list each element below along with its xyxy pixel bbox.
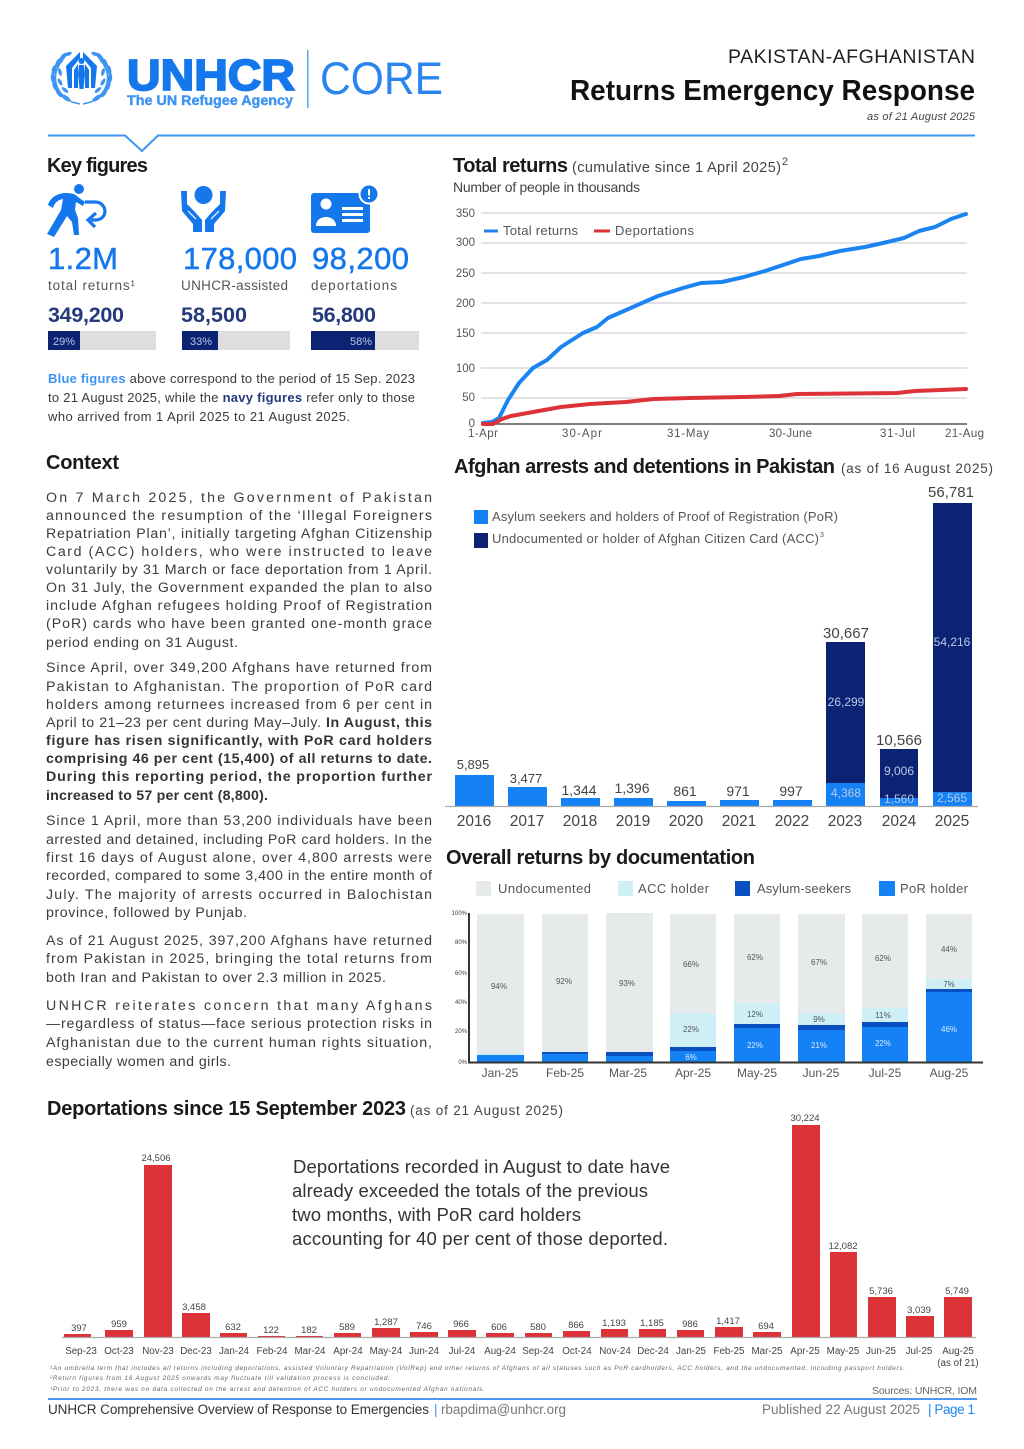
text block: context paragraph 2: holders among returnees increased from 6 per cent in bbox=[46, 697, 432, 713]
text block: context paragraph 5 bbox=[46, 998, 432, 1070]
footer: rbapdima@unhcr.org bbox=[441, 1402, 566, 1417]
text block: context paragraph 3: recorded, compared to some 3,400 in the entire month of bbox=[46, 868, 432, 884]
text block: context paragraph 3: Since 1 April, more than 53,200 individuals have been bbox=[46, 813, 432, 829]
legend: arrests: 3 bbox=[820, 532, 824, 539]
text block: context paragraph 1: (PoR) cards who have been granted one-month grace bbox=[46, 616, 432, 632]
x axis years bbox=[457, 813, 969, 830]
x axis months: Feb-24 bbox=[256, 1346, 288, 1357]
stat: total returns: 349,200 bbox=[48, 303, 124, 327]
x axis years: 2025 bbox=[935, 813, 969, 830]
footer: | Page 1 bbox=[928, 1402, 975, 1417]
y axis percentages: 60% bbox=[455, 971, 468, 977]
bar totals: 1,344 bbox=[561, 782, 597, 798]
percentage labels: 62% bbox=[875, 954, 891, 963]
bar value labels bbox=[71, 1113, 969, 1336]
bar totals: 861 bbox=[673, 783, 697, 799]
heading: deportations bbox=[47, 1098, 563, 1120]
text block: context paragraph 1: Repatriation Plan’, initially targeting Afghan Citizenship bbox=[46, 526, 432, 542]
percentage labels: 7% bbox=[943, 980, 955, 989]
text block: context paragraph 2: comprising 46 per cent (15,400) of all returns to date. bbox=[46, 751, 432, 767]
text block: context paragraph 3: arrested and detained, including PoR card holders. In the bbox=[46, 832, 432, 848]
x axis months: Oct-24 bbox=[562, 1346, 592, 1357]
bar value labels: 122 bbox=[263, 1325, 279, 1336]
panel: context bbox=[46, 452, 432, 1070]
legend: documentation: ACC holder bbox=[638, 881, 710, 896]
bar value labels: 746 bbox=[416, 1321, 432, 1332]
bar totals bbox=[457, 484, 974, 799]
x axis months: Apr-24 bbox=[333, 1346, 363, 1357]
x axis months: Mar-25 bbox=[751, 1346, 783, 1357]
bar value labels: 866 bbox=[568, 1320, 584, 1331]
x axis months: Aug-25 bbox=[930, 1066, 969, 1080]
y axis percentages: 0% bbox=[458, 1060, 468, 1066]
legend: documentation bbox=[476, 881, 969, 896]
heading: total returns: Total returns bbox=[453, 155, 568, 177]
stat: UNHCR-assisted: 58,500 bbox=[181, 303, 247, 327]
text block: key figures note bbox=[47, 371, 415, 424]
text block: context paragraph 4: both Iran and Pakistan to over 2.3 million in 2025. bbox=[46, 970, 386, 986]
legend: arrests: Asylum seekers and holders of Proof of Registration (PoR) bbox=[492, 509, 838, 524]
percentage labels: 44% bbox=[941, 945, 957, 954]
x axis years: 2018 bbox=[563, 813, 597, 830]
bar value labels: 966 bbox=[453, 1319, 469, 1330]
heading: total returns: 2 bbox=[782, 156, 788, 168]
x axis months: Jun-24 bbox=[409, 1346, 440, 1357]
icon: person returning bbox=[47, 184, 105, 237]
x axis months: Sep-24 bbox=[522, 1346, 554, 1357]
x axis months: Apr-25 bbox=[675, 1066, 711, 1080]
bar value labels: 12,082 bbox=[828, 1241, 858, 1252]
icon: UNHCR laurel and sheltering hands emblem bbox=[50, 51, 113, 104]
stat: UNHCR-assisted: 33% bbox=[190, 336, 212, 348]
x axis months: Jan-25 bbox=[482, 1066, 519, 1080]
text block: context paragraph 1: announced the resumption of the ‘Illegal Foreigners bbox=[46, 508, 432, 524]
line: total returns bbox=[483, 214, 966, 423]
y axis percentages: 20% bbox=[455, 1029, 468, 1035]
heading: total returns bbox=[453, 155, 788, 177]
legend: documentation: Asylum-seekers bbox=[757, 881, 852, 896]
x axis months: Dec-23 bbox=[180, 1346, 212, 1357]
text block: context paragraph 1: Card (ACC) holders, who were instructed to leave bbox=[46, 544, 432, 560]
stacked percentage bars bbox=[477, 913, 972, 1062]
y axis labels: 50 bbox=[462, 392, 475, 404]
bar inner values: 1,560 bbox=[884, 792, 914, 806]
bar totals: 10,566 bbox=[876, 732, 922, 749]
text block: context paragraph 3 bbox=[46, 813, 432, 921]
percentage labels: 92% bbox=[556, 977, 572, 986]
footnotes: ³Prior to 2023, there was no data collected on the arrest and detention of ACC holders or undocumented Afghan nationals. bbox=[50, 1386, 485, 1393]
header: report title bbox=[570, 46, 976, 123]
y axis labels: 200 bbox=[456, 298, 475, 310]
y axis percentages: 100% bbox=[452, 911, 468, 917]
stacked bars by year bbox=[455, 503, 972, 806]
text block: context paragraph 5: —regardless of status—face serious protection risks in bbox=[46, 1016, 432, 1032]
bar value labels: 694 bbox=[758, 1321, 774, 1332]
text block: context paragraph 3: first 16 days of August alone, over 4,800 arrests were bbox=[46, 850, 432, 866]
percentage labels: 11% bbox=[875, 1011, 891, 1020]
percentage labels: 93% bbox=[619, 979, 635, 988]
text block: context paragraph 4: As of 21 August 2025, 397,200 Afghans have returned bbox=[46, 933, 432, 949]
stat: deportations: deportations bbox=[311, 278, 397, 293]
bar totals: 971 bbox=[726, 783, 750, 799]
stat: total returns bbox=[48, 241, 156, 350]
text block: context paragraph 1: On 7 March 2025, the Government of Pakistan bbox=[46, 490, 432, 506]
heading: deportations: (as of 21 August 2025) bbox=[410, 1103, 563, 1118]
y axis labels: 0 bbox=[469, 418, 475, 430]
y axis labels: 350 bbox=[456, 208, 475, 220]
percentage labels: 22% bbox=[683, 1025, 699, 1034]
header: report title: PAKISTAN-AFGHANISTAN bbox=[728, 46, 975, 68]
percentage labels: 12% bbox=[747, 1010, 763, 1019]
percentage labels: 62% bbox=[747, 953, 763, 962]
percentage labels: 94% bbox=[491, 982, 507, 991]
x axis months: Jul-25 bbox=[869, 1066, 902, 1080]
text block: context paragraph 2 bbox=[46, 660, 432, 804]
x axis months: Jan-25 bbox=[676, 1346, 707, 1357]
x axis labels: 30-Apr bbox=[562, 428, 602, 440]
bar totals: 56,781 bbox=[928, 484, 974, 501]
stat: UNHCR-assisted: UNHCR-assisted bbox=[181, 278, 288, 293]
bar value labels: 3,458 bbox=[182, 1302, 206, 1313]
footer: | bbox=[434, 1402, 438, 1417]
text block: context paragraph 4 bbox=[46, 933, 432, 986]
footnotes bbox=[50, 1365, 905, 1393]
callout: August deportations: Deportations recorded in August to date have bbox=[293, 1156, 670, 1177]
bar inner values: 2,565 bbox=[937, 791, 967, 805]
x axis months: Apr-25 bbox=[790, 1346, 820, 1357]
heading: deportations: Deportations since 15 September 2023 bbox=[47, 1098, 406, 1120]
x axis months: Nov-23 bbox=[142, 1346, 174, 1357]
subtitle: units: Number of people in thousands bbox=[453, 179, 640, 195]
text block: context paragraph 4: from Pakistan in 2025, bringing the total returns from bbox=[46, 951, 432, 967]
stat: UNHCR-assisted bbox=[181, 241, 297, 350]
x axis months: Aug-25 bbox=[942, 1346, 974, 1357]
stat: total returns: 29% bbox=[53, 336, 75, 348]
bar value labels: 1,287 bbox=[374, 1317, 398, 1328]
monthly deportation bars bbox=[64, 1125, 972, 1337]
stat: deportations: 98,200 bbox=[312, 241, 409, 276]
y axis labels: 100 bbox=[456, 363, 475, 375]
footer: UNHCR Comprehensive Overview of Response to Emergencies bbox=[48, 1402, 429, 1417]
legend: line chart: Deportations bbox=[615, 223, 694, 238]
text block: context paragraph 2: figure has risen significantly, with PoR card holders bbox=[46, 733, 432, 749]
bar value labels: 632 bbox=[225, 1322, 241, 1333]
bar inner values bbox=[828, 635, 971, 806]
heading: total returns: (cumulative since 1 April 2025) bbox=[572, 160, 781, 176]
bar value labels: 5,736 bbox=[869, 1286, 893, 1297]
y axis percentages bbox=[452, 911, 468, 1066]
panel: returns by documentation chart bbox=[446, 847, 983, 1080]
footnotes: ²Return figures from 16 August 2025 onwards may fluctuate till validation process is concluded. bbox=[50, 1375, 390, 1382]
heading: returns by documentation: Overall returns by documentation bbox=[446, 847, 755, 869]
footnotes: ¹An umbrella term that includes all returns including deportations, assisted Voluntary Repatriation (VolRep) and other returns of Afghans of all statuses such as PoR cardholders, ACC holders, and the undocumented, including passport holders. bbox=[50, 1365, 905, 1372]
x axis months: Mar-24 bbox=[294, 1346, 326, 1357]
text block: context paragraph 3: July. The majority of arrests occurred in Balochistan bbox=[46, 887, 432, 903]
percentage labels: 21% bbox=[811, 1041, 827, 1050]
text block: context paragraph 1: include Afghan refugees holding Proof of Registration bbox=[46, 598, 432, 614]
percentage labels: 46% bbox=[941, 1025, 957, 1034]
stat: deportations: 58% bbox=[350, 336, 372, 348]
legend: arrests: Undocumented or holder of Afghan Citizen Card (ACC) bbox=[492, 531, 819, 546]
bar inner values: 4,368 bbox=[831, 786, 861, 800]
x axis months: Jun-25 bbox=[803, 1066, 840, 1080]
x axis labels: 30-June bbox=[769, 428, 812, 440]
text block: context paragraph 1: On 31 July, the Government expanded the plan to also bbox=[46, 580, 432, 596]
bar value labels: 580 bbox=[530, 1322, 546, 1333]
x axis labels: 1-Apr bbox=[468, 428, 498, 440]
x axis months: Jul-24 bbox=[449, 1346, 476, 1357]
bar value labels: 30,224 bbox=[790, 1113, 820, 1124]
x axis years: 2022 bbox=[775, 813, 809, 830]
bar value labels: 986 bbox=[682, 1319, 698, 1330]
panel: deportations bar chart bbox=[47, 1098, 979, 1369]
percentage labels: 67% bbox=[811, 958, 827, 967]
x axis years: 2017 bbox=[510, 813, 544, 830]
text block: context paragraph 2: April to 21–23 per cent during May–July. In August, this bbox=[46, 715, 432, 731]
bar value labels: 397 bbox=[71, 1323, 87, 1334]
header: UNHCR CORE logo bbox=[50, 50, 443, 108]
percentage labels: 66% bbox=[683, 960, 699, 969]
bar totals: 997 bbox=[779, 783, 803, 799]
panel: total returns line chart bbox=[453, 155, 984, 440]
x axis months: Sep-23 bbox=[65, 1346, 97, 1357]
text block: context paragraph 5: especially women and girls. bbox=[46, 1054, 231, 1070]
x axis months: Mar-25 bbox=[609, 1066, 647, 1080]
percentage labels: 6% bbox=[685, 1053, 697, 1062]
bar totals: 3,477 bbox=[510, 771, 542, 786]
bar value labels: 5,749 bbox=[945, 1286, 969, 1297]
stat: total returns: total returns¹ bbox=[48, 278, 136, 293]
bar value labels: 1,193 bbox=[602, 1318, 626, 1329]
percentage labels: 22% bbox=[875, 1039, 891, 1048]
bar value labels: 182 bbox=[301, 1325, 317, 1336]
percentage labels: 22% bbox=[747, 1041, 763, 1050]
heading: arrests and detentions: Afghan arrests and detentions in Pakistan bbox=[454, 456, 835, 478]
x axis years: 2024 bbox=[882, 813, 917, 830]
y axis labels: 250 bbox=[456, 268, 475, 280]
x axis labels bbox=[468, 428, 984, 440]
footer: Published 22 August 2025 bbox=[762, 1402, 920, 1417]
x axis years: 2021 bbox=[722, 813, 756, 830]
x axis years: 2016 bbox=[457, 813, 491, 830]
stat: UNHCR-assisted: 178,000 bbox=[183, 241, 297, 276]
text block: context paragraph 1: period ending on 31 August. bbox=[46, 635, 238, 651]
bar totals: 5,895 bbox=[457, 757, 489, 772]
bar value labels: 606 bbox=[491, 1322, 507, 1333]
stat: deportations: 56,800 bbox=[312, 303, 376, 327]
tagline: The UN Refugee Agency bbox=[127, 93, 294, 108]
bar inner values: 9,006 bbox=[884, 764, 914, 778]
wordmark: UNHCR: UNHCR bbox=[127, 51, 295, 100]
text block: context paragraph 5: UNHCR reiterates concern that many Afghans bbox=[46, 998, 432, 1014]
x axis years: 2023 bbox=[828, 813, 862, 830]
x axis labels: 31-Jul bbox=[880, 428, 915, 440]
x axis months: Dec-24 bbox=[637, 1346, 669, 1357]
text block: context paragraph 3: province, followed by Punjab. bbox=[46, 905, 247, 921]
x axis months: Jun-25 bbox=[866, 1346, 897, 1357]
x axis months: Feb-25 bbox=[546, 1066, 584, 1080]
legend: line chart bbox=[484, 223, 694, 238]
percentage labels bbox=[491, 945, 957, 1062]
x axis months: Feb-25 bbox=[713, 1346, 745, 1357]
bar totals: 1,396 bbox=[614, 780, 650, 796]
panel: arrests and detentions chart bbox=[445, 456, 993, 830]
icon: ID card with alert bbox=[311, 184, 380, 233]
x axis labels: 21-Aug bbox=[945, 428, 984, 440]
bar value labels: 1,185 bbox=[640, 1318, 664, 1329]
x axis labels: 31-May bbox=[667, 428, 709, 440]
bar value labels: 589 bbox=[339, 1322, 355, 1333]
x axis months bbox=[482, 1066, 969, 1080]
x axis months: Jul-25 bbox=[906, 1346, 933, 1357]
x axis months: Nov-24 bbox=[599, 1346, 631, 1357]
legend: line chart: Total returns bbox=[503, 223, 578, 238]
bar value labels: 3,039 bbox=[907, 1305, 931, 1316]
line: deportations bbox=[483, 389, 966, 424]
x axis months: Jan-24 bbox=[219, 1346, 250, 1357]
stat: total returns: 1.2M bbox=[48, 241, 118, 276]
text block: context paragraph 2: Since April, over 349,200 Afghans have returned from bbox=[46, 660, 432, 676]
x axis months: Oct-23 bbox=[104, 1346, 134, 1357]
callout: August deportations bbox=[292, 1156, 670, 1249]
bar value labels: 1,417 bbox=[716, 1316, 740, 1327]
y axis labels: 300 bbox=[456, 237, 475, 249]
y axis percentages: 80% bbox=[455, 940, 468, 946]
text block: key figures note: who arrived from 1 April 2025 to 21 August 2025. bbox=[47, 409, 350, 424]
header: report title: as of 21 August 2025 bbox=[867, 111, 976, 123]
x axis months: May-25 bbox=[737, 1066, 777, 1080]
y axis percentages: 40% bbox=[455, 1000, 468, 1006]
x axis months: (as of 21) bbox=[937, 1358, 979, 1369]
bar inner values: 26,299 bbox=[828, 695, 865, 709]
heading: context: Context bbox=[46, 452, 119, 474]
callout: August deportations: two months, with PoR card holders bbox=[292, 1204, 581, 1225]
header: report title: Returns Emergency Response bbox=[570, 75, 975, 107]
bar value labels: 959 bbox=[111, 1319, 127, 1330]
wordmark: CORE: CORE bbox=[320, 53, 443, 104]
x axis years: 2020 bbox=[669, 813, 704, 830]
text block: context paragraph 5: Afghanistan due to the current human rights situation, bbox=[46, 1035, 432, 1051]
x axis months: May-24 bbox=[370, 1346, 403, 1357]
stat: deportations bbox=[311, 241, 419, 350]
text block: context paragraph 1 bbox=[46, 490, 432, 651]
text block: context paragraph 2: increased to 57 per cent (8,800). bbox=[46, 788, 268, 804]
heading: key figures: Key figures bbox=[47, 155, 148, 177]
callout: August deportations: accounting for 40 per cent of those deported. bbox=[292, 1228, 668, 1249]
x axis years: 2019 bbox=[616, 813, 650, 830]
callout: August deportations: already exceeded the totals of the previous bbox=[292, 1180, 648, 1201]
heading: arrests and detentions: (as of 16 August 2025) bbox=[841, 461, 993, 476]
text block: context paragraph 2: Pakistan to Afghanistan. The proportion of PoR card bbox=[46, 679, 432, 695]
x axis months: May-25 bbox=[827, 1346, 860, 1357]
legend: arrests bbox=[474, 509, 838, 548]
bar inner values: 54,216 bbox=[934, 635, 971, 649]
x axis months: Aug-24 bbox=[484, 1346, 516, 1357]
bar value labels: 24,506 bbox=[141, 1153, 171, 1164]
y axis labels: 150 bbox=[456, 328, 475, 340]
footer bbox=[48, 1402, 975, 1417]
legend: documentation: PoR holder bbox=[900, 881, 969, 896]
text block: context paragraph 2: During this reporting period, the proportion further bbox=[46, 769, 432, 785]
icon: supporting hands bbox=[181, 186, 226, 232]
y axis labels bbox=[456, 208, 475, 430]
text block: context paragraph 1: voluntarily by 31 March or face deportation from 1 April. bbox=[46, 562, 432, 578]
bar totals: 30,667 bbox=[823, 625, 869, 642]
percentage labels: 9% bbox=[813, 1015, 825, 1024]
text block: key figures note: Blue figures above correspond to the period of 15 Sep. 2023 bbox=[48, 371, 415, 386]
text block: key figures note: to 21 August 2025, while the navy figures refer only to those bbox=[48, 390, 415, 405]
legend: documentation: Undocumented bbox=[498, 881, 591, 896]
x axis months bbox=[65, 1346, 979, 1369]
sources: Sources: UNHCR, IOM bbox=[872, 1385, 977, 1397]
panel: key figures bbox=[47, 155, 419, 424]
